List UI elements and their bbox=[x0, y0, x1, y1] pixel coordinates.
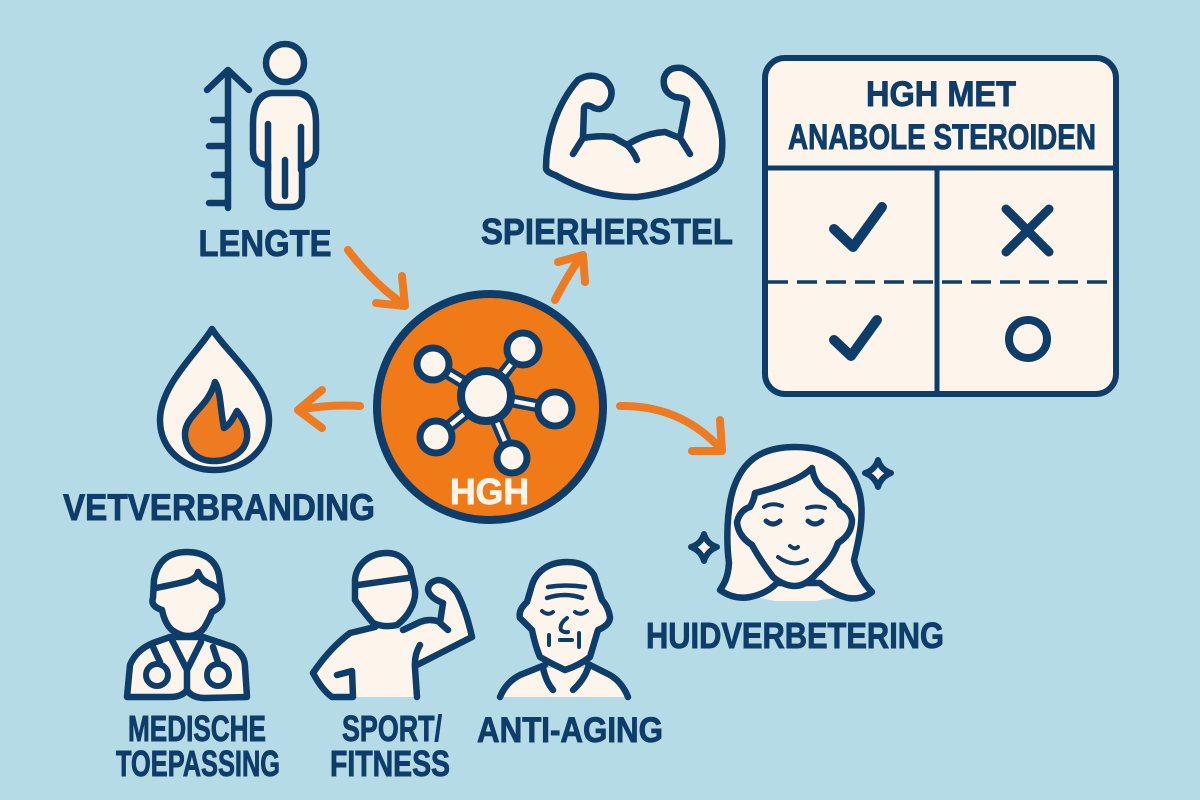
icon: woman face bbox=[720, 447, 872, 601]
label: huidverbetering: HUIDVERBETERING bbox=[646, 615, 944, 656]
table: HGH met anabole steroiden: ANABOLE STEROIDEN bbox=[788, 118, 1096, 157]
label: medische toepassing bbox=[116, 708, 280, 784]
HGH label: HGH bbox=[450, 471, 529, 512]
neck fill bbox=[760, 585, 835, 601]
arrow: HGH to spierherstel bbox=[555, 255, 585, 300]
label: sport/fitness: FITNESS bbox=[330, 743, 450, 784]
icon: flexed muscle bbox=[546, 68, 722, 197]
icon: sport person bbox=[313, 553, 472, 697]
central HGH circle bbox=[377, 294, 603, 520]
table heading: HGH MET bbox=[866, 75, 1016, 114]
label: medische toepassing: MEDISCHE bbox=[128, 708, 266, 749]
molecule icon bbox=[417, 333, 572, 473]
label: anti-aging: ANTI-AGING bbox=[477, 711, 663, 750]
muscle detail bbox=[573, 138, 690, 160]
icon: check small bbox=[834, 320, 877, 356]
arrow: lengte to HGH bbox=[348, 250, 405, 306]
arrow: HGH to huidverbetering bbox=[620, 406, 722, 451]
label: sport/fitness bbox=[330, 708, 450, 784]
label: sport/fitness: SPORT/ bbox=[342, 708, 442, 749]
icon: height person bbox=[207, 44, 316, 208]
icon: check bbox=[834, 207, 882, 247]
label: spierherstel: SPIERHERSTEL bbox=[481, 211, 733, 252]
table: HGH met anabole steroiden bbox=[765, 58, 1116, 394]
icon: sparkles bbox=[691, 460, 891, 561]
label: medische toepassing: TOEPASSING bbox=[116, 743, 280, 784]
icon: cross bbox=[1006, 209, 1049, 252]
label: vetverbranding: VETVERBRANDING bbox=[63, 487, 375, 528]
icon: doctor bbox=[127, 552, 247, 698]
arrow: HGH to vetverbranding bbox=[298, 390, 360, 428]
body fill bbox=[313, 580, 472, 697]
icon: circle bbox=[1009, 320, 1047, 358]
icon: flame drop bbox=[160, 329, 269, 470]
icon: elderly person bbox=[500, 562, 628, 697]
label: lengte: LENGTE bbox=[198, 223, 332, 264]
